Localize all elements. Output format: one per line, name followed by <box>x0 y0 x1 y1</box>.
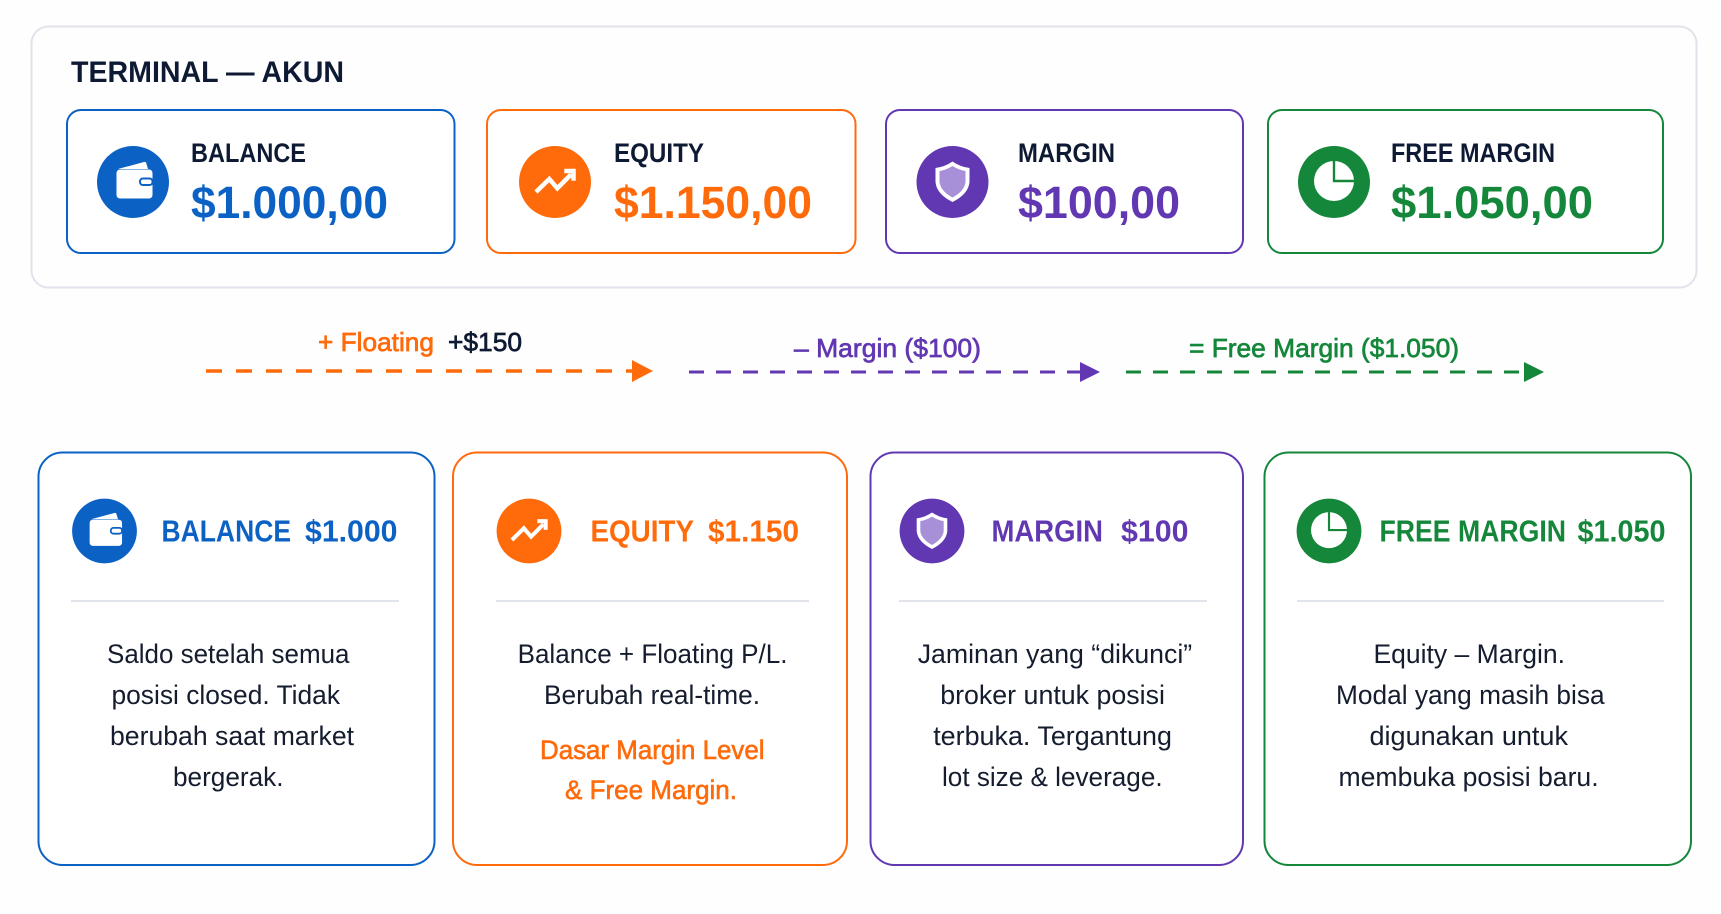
text: equity description <box>518 639 788 710</box>
heading: balance <box>162 514 398 548</box>
text: equity description: Berubah real-time. <box>544 680 760 710</box>
title: TERMINAL — AKUN <box>71 56 344 89</box>
icon: shield <box>916 146 988 218</box>
text: equity description: Balance + Floating P/L. <box>518 639 788 669</box>
text: margin description: Jaminan yang “dikunci” <box>918 639 1192 669</box>
card: margin <box>886 110 1243 253</box>
text: balance description: berubah saat market <box>110 721 354 751</box>
value: equity: $1.150,00 <box>614 177 812 228</box>
text: balance description: posisi closed. Tidak <box>112 680 340 710</box>
heading: balance: $1.000 <box>305 514 398 548</box>
card: free margin <box>1268 110 1663 253</box>
icon: wallet <box>72 499 137 563</box>
icon: wallet <box>97 146 169 218</box>
value: margin: $100,00 <box>1018 177 1180 228</box>
icon: trend up <box>497 499 561 563</box>
heading: equity <box>590 514 799 548</box>
heading: margin: MARGIN <box>992 514 1103 548</box>
text: free margin description: Modal yang masih bisa <box>1336 680 1606 710</box>
panel: balance detail <box>38 452 434 865</box>
heading: free margin: FREE MARGIN <box>1380 514 1566 548</box>
arrow: free margin <box>1126 333 1544 382</box>
icon: shield <box>900 499 964 563</box>
heading: margin <box>992 514 1188 548</box>
label: equity: EQUITY <box>614 138 704 168</box>
heading: balance: BALANCE <box>162 514 291 548</box>
card: equity <box>487 110 856 253</box>
text: equity highlight: & Free Margin. <box>565 775 737 805</box>
text: balance description: Saldo setelah semua <box>107 639 350 669</box>
label: free margin: FREE MARGIN <box>1391 138 1555 168</box>
panel: terminal akun <box>32 26 1696 288</box>
value: balance: $1.000,00 <box>191 177 388 228</box>
text: free margin description: Equity – Margin. <box>1374 639 1565 669</box>
text: margin description: broker untuk posisi <box>940 680 1165 710</box>
arrow: margin: – Margin ($100) <box>794 333 981 363</box>
panel: margin detail <box>870 452 1243 865</box>
text: free margin description <box>1336 639 1606 792</box>
heading: free margin: $1.050 <box>1578 514 1666 548</box>
icon: pie chart <box>1297 499 1361 563</box>
card: balance <box>67 110 454 253</box>
icon: pie chart <box>1298 146 1370 218</box>
text: equity highlight: Dasar Margin Level <box>540 735 764 765</box>
text: margin description <box>918 639 1192 792</box>
text: balance description: bergerak. <box>173 762 284 792</box>
panel: free margin detail <box>1264 452 1691 865</box>
text: free margin description: membuka posisi baru. <box>1338 762 1599 792</box>
icon: trend up <box>519 146 591 218</box>
label: balance: BALANCE <box>191 138 306 168</box>
arrow: free margin: = Free Margin ($1.050) <box>1189 333 1459 363</box>
text: margin description: lot size & leverage. <box>942 762 1163 792</box>
heading: margin: $100 <box>1121 514 1188 548</box>
label: margin: MARGIN <box>1018 138 1115 168</box>
text: free margin description: digunakan untuk <box>1370 721 1568 751</box>
panel: equity detail <box>453 452 847 865</box>
value: free margin: $1.050,00 <box>1391 177 1593 228</box>
arrow: floating <box>206 327 653 382</box>
heading: equity: EQUITY <box>590 514 694 548</box>
text: balance description <box>107 639 354 792</box>
arrow: margin <box>689 333 1100 382</box>
text: margin description: terbuka. Tergantung <box>933 721 1172 751</box>
arrow: floating: +$150 <box>448 327 522 357</box>
text: equity highlight <box>540 735 764 805</box>
arrow: floating: + Floating <box>318 327 434 357</box>
heading: equity: $1.150 <box>708 514 799 548</box>
